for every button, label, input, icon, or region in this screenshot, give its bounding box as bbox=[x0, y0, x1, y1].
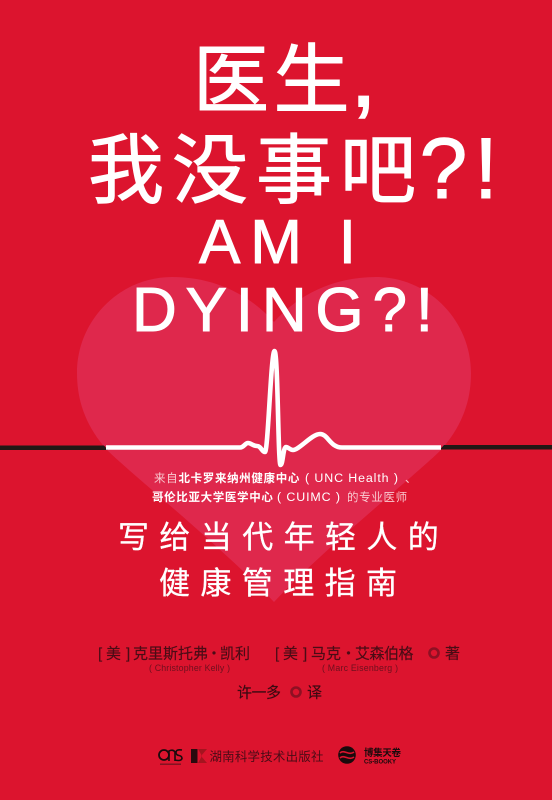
logo: CNS bbox=[159, 750, 182, 765]
icon: translucent heart bbox=[77, 277, 471, 602]
logo: K mark bbox=[191, 749, 207, 763]
author 2 English name: ( Marc Eisenberg ) bbox=[322, 663, 398, 673]
affiliation lead-in: 来自 bbox=[154, 470, 178, 486]
author 2 nationality: ] bbox=[303, 646, 307, 662]
translator role: 译 bbox=[307, 682, 322, 702]
affiliation text bbox=[152, 470, 416, 505]
publisher name: 湖南科学技术出版社 bbox=[210, 746, 324, 765]
black line left bbox=[0, 446, 108, 450]
author 2 surname: 艾森伯格 bbox=[355, 642, 414, 664]
author 1 nationality: ] bbox=[126, 646, 130, 662]
affiliation org two: 哥伦比亚大学医学中心 bbox=[152, 489, 274, 505]
affiliation tail: 的专业医师 bbox=[347, 489, 408, 505]
title exclamation mark: ! bbox=[474, 121, 498, 217]
tagline line 2: 健康管理指南 bbox=[159, 558, 407, 603]
title question mark: ? bbox=[420, 121, 467, 217]
title line 2: 我没事吧 bbox=[88, 109, 424, 219]
author role: 著 bbox=[445, 642, 460, 664]
title line 1: 医生 bbox=[193, 19, 354, 129]
title: Chinese bbox=[88, 19, 498, 219]
imprint English: CS-BOOKY bbox=[364, 760, 396, 766]
affiliation comma: 、 bbox=[405, 470, 416, 486]
imprint name: 博集天卷 bbox=[364, 745, 401, 759]
icon: translator ring bbox=[292, 688, 300, 696]
author 2: 马克 bbox=[311, 642, 341, 664]
affiliation org two English: ( CUIMC ) bbox=[277, 490, 341, 504]
title comma: , bbox=[353, 39, 374, 124]
icon: author ring bbox=[430, 648, 438, 658]
author 1 surname: 凯利 bbox=[220, 642, 250, 664]
author 1 name dot: · bbox=[206, 642, 222, 664]
English line 1: AM I bbox=[199, 208, 356, 277]
heartbeat line bbox=[106, 351, 441, 465]
tagline line 1: 写给当代年轻人的 bbox=[118, 512, 449, 557]
logo: swirl bbox=[338, 746, 356, 764]
author 1 nationality: 美 bbox=[106, 642, 121, 664]
author 2 nationality: [ bbox=[275, 646, 279, 662]
author 1: 克里斯托弗 bbox=[133, 642, 208, 664]
author 1 nationality: [ bbox=[98, 646, 102, 662]
affiliation org one: 北卡罗来纳州健康中心 bbox=[178, 470, 300, 486]
author 2 nationality: 美 bbox=[283, 642, 298, 664]
authors bbox=[98, 642, 460, 673]
author 1 English name: ( Christopher Kelly ) bbox=[149, 663, 230, 673]
translator name: 许一多 bbox=[237, 682, 281, 702]
English line 2: DYING?! bbox=[132, 276, 433, 345]
title: English bbox=[132, 208, 433, 345]
affiliation org one English: ( UNC Health ) bbox=[305, 471, 399, 485]
tagline bbox=[118, 512, 449, 603]
publisher logos bbox=[159, 745, 401, 766]
author 2 name dot: · bbox=[341, 642, 356, 664]
black line right bbox=[440, 445, 552, 450]
translator bbox=[237, 682, 322, 702]
